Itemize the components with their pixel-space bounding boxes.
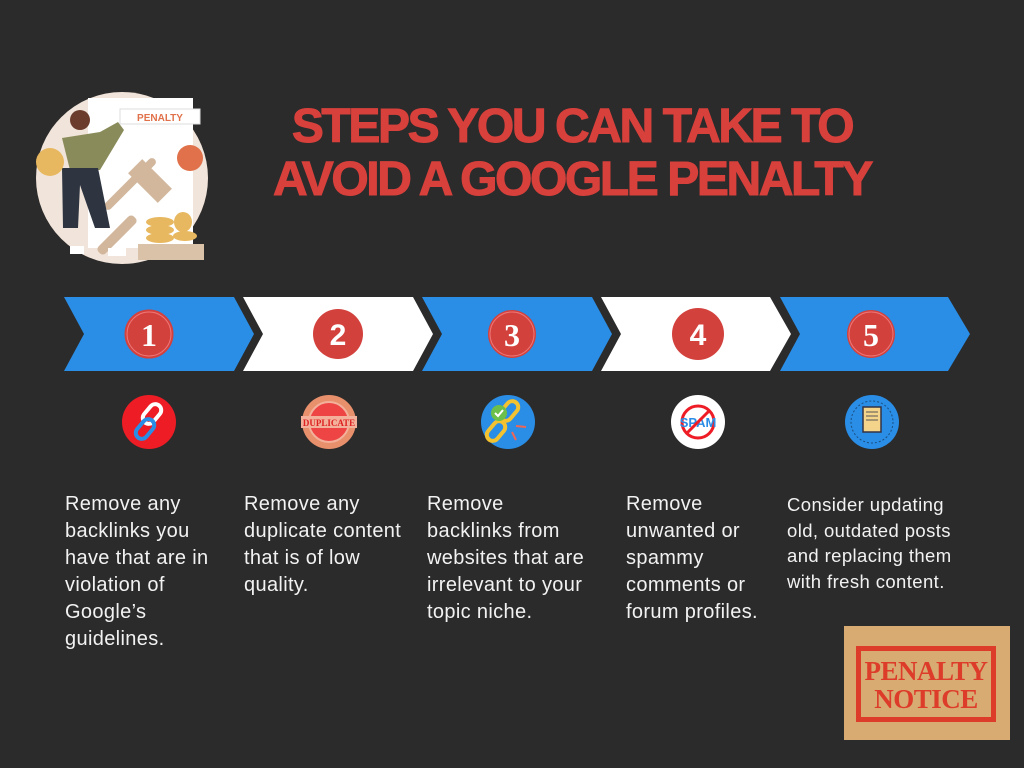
title (273, 100, 874, 206)
text step 3: Remove (427, 493, 504, 515)
title: AVOID A GOOGLE PENALTY (273, 153, 871, 206)
chevron 5: 5 (863, 317, 879, 353)
chevron 4: 4 (690, 319, 707, 352)
text step 1: have that are in (65, 547, 208, 569)
text step 5: Consider updating (787, 494, 944, 515)
text step 3 (427, 493, 584, 623)
text step 1: backlinks you (65, 520, 190, 542)
icon: duplicate stamp: DUPLICATE (303, 418, 355, 428)
chevron row (64, 297, 970, 449)
penalty notice image (844, 626, 1010, 740)
chevron 2: 2 (330, 319, 346, 352)
chevron 2 (243, 297, 433, 371)
icon: duplicate stamp (301, 395, 357, 449)
chevron 3 (422, 297, 612, 371)
text step 1: Remove any (65, 493, 181, 515)
text step 2: that is of low (244, 547, 360, 569)
text step 3: topic niche. (427, 601, 532, 623)
chevron 3: 3 (504, 317, 520, 353)
text step 2 (244, 493, 401, 596)
icon: document (845, 395, 899, 449)
text step 4: Remove (626, 493, 703, 515)
text step 1: guidelines. (65, 628, 164, 650)
text step 1: violation of (65, 574, 165, 596)
text step 3: websites that are (427, 547, 584, 569)
text step 4: unwanted or (626, 520, 740, 542)
penalty notice image: NOTICE (874, 684, 978, 714)
text step 3: backlinks from (427, 520, 560, 542)
text step 4 (626, 493, 758, 623)
text step 4: spammy (626, 547, 704, 569)
text step 2: duplicate content (244, 520, 401, 542)
chevron 5 (780, 297, 970, 371)
text step 5: and replacing them (787, 545, 952, 566)
icon: link (122, 395, 176, 449)
illustration: penalty: PENALTY (137, 113, 183, 124)
text step 4: forum profiles. (626, 601, 758, 623)
icon: broken link (481, 395, 535, 449)
penalty notice image: PENALTY (864, 656, 988, 686)
chevron 1: 1 (141, 317, 157, 353)
text step 5: old, outdated posts (787, 520, 951, 540)
text step 3: irrelevant to your (427, 574, 582, 596)
text step 5: with fresh content. (787, 570, 945, 592)
icon: no spam: SPAM (680, 415, 716, 430)
chevron 4 (601, 297, 791, 371)
text step 2: quality. (244, 574, 309, 596)
chevron 1 (64, 297, 254, 371)
text step 2: Remove any (244, 493, 360, 515)
illustration: penalty (36, 92, 208, 264)
icon: no spam (671, 395, 725, 449)
text step 1: Google’s (65, 601, 146, 623)
text step 5 (787, 494, 952, 592)
title: STEPS YOU CAN TAKE TO (292, 100, 852, 153)
text step 1 (65, 493, 208, 650)
text step 4: comments or (626, 574, 745, 596)
